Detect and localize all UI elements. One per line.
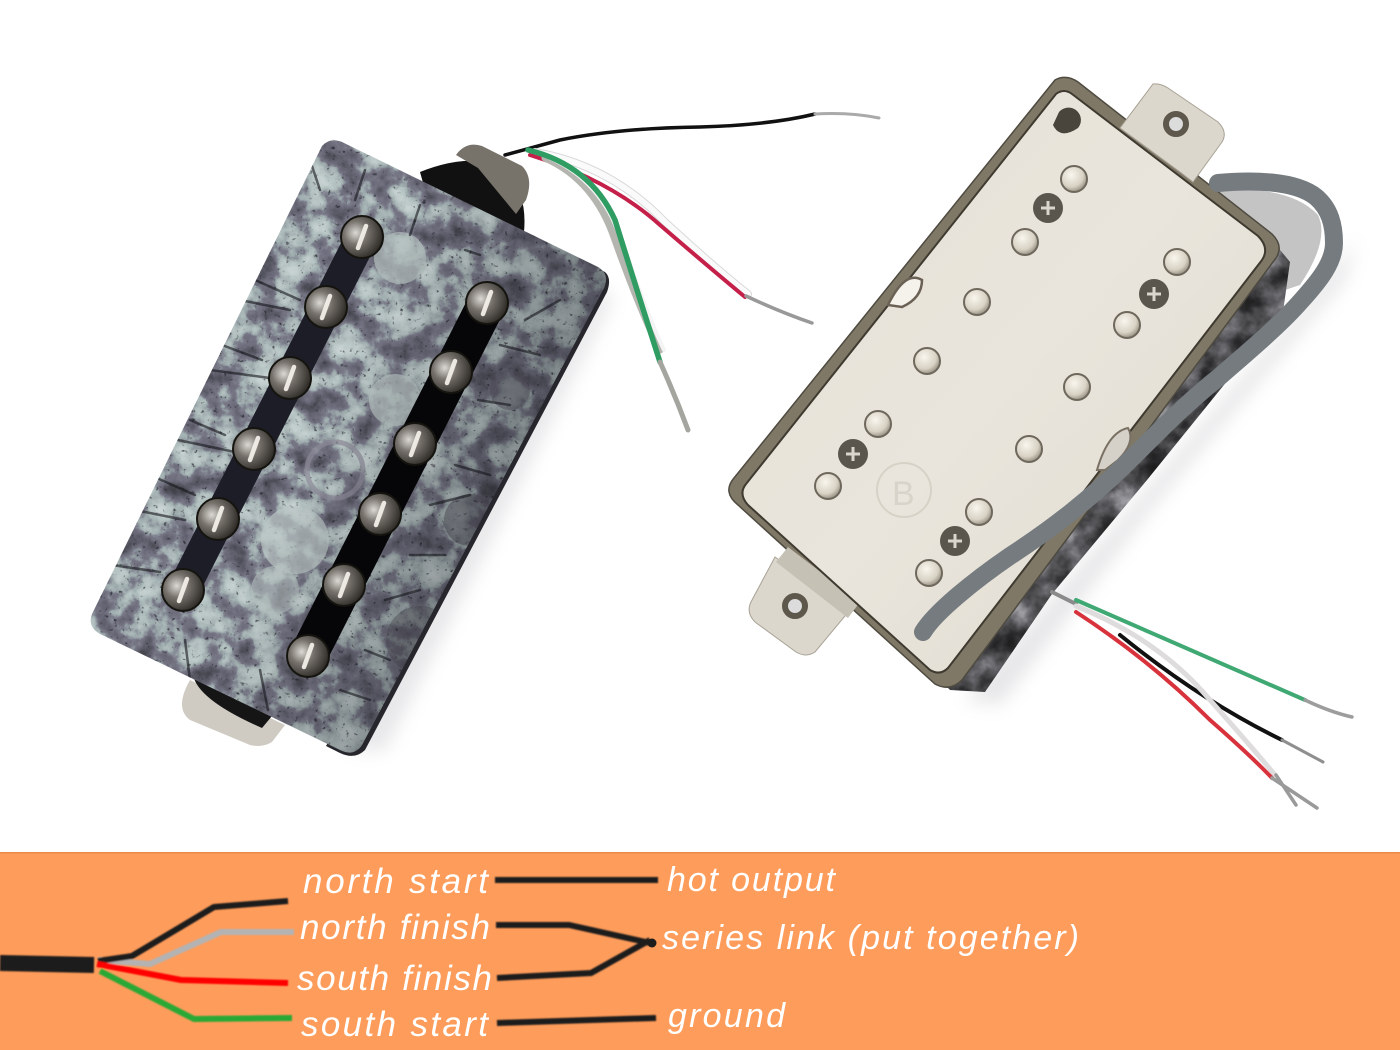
red wire bbox=[1076, 612, 1272, 778]
line: north start to hot output bbox=[495, 877, 658, 883]
bobbin bar: north bbox=[183, 237, 362, 590]
pole pieces: south row bbox=[287, 282, 508, 677]
label: north start: north start bbox=[303, 862, 489, 901]
cable and colored wires bbox=[0, 901, 294, 1019]
cable inner shadow bbox=[1215, 189, 1321, 290]
red wire bbox=[97, 964, 288, 983]
base plate bbox=[742, 91, 1265, 673]
line: south start to ground bbox=[497, 1018, 656, 1023]
photo: back of pickup with base plate bbox=[729, 77, 1355, 808]
phillips screws on base plate bbox=[838, 193, 1169, 556]
embossed logo bbox=[877, 463, 931, 517]
panel background bbox=[0, 852, 1400, 1050]
label: south finish: south finish bbox=[297, 959, 492, 998]
solder joints bbox=[888, 278, 922, 307]
shadow: front pickup bbox=[350, 285, 612, 750]
gray bare wire bbox=[545, 158, 660, 350]
label: south start: south start bbox=[301, 1005, 489, 1044]
pickup side edge bbox=[326, 139, 609, 756]
black stripped end bbox=[1282, 740, 1323, 762]
red and white stripped end bbox=[746, 296, 812, 323]
pole pieces: north row bbox=[162, 216, 383, 611]
pickup side with camouflage bbox=[948, 250, 1290, 692]
hole in plate corner bbox=[1053, 108, 1081, 133]
wires: front pickup bbox=[505, 114, 879, 430]
cover rim bbox=[729, 77, 1279, 687]
panel: wiring diagram bbox=[0, 852, 1400, 1050]
grey shielded cable bbox=[923, 181, 1334, 632]
camouflage cover bbox=[80, 130, 620, 760]
mounting ring: front bottom bbox=[193, 675, 272, 728]
green stripped end bbox=[1305, 700, 1352, 717]
mounting ring: front top bbox=[420, 161, 524, 232]
black wire bbox=[98, 901, 288, 961]
green wire bbox=[1076, 600, 1305, 700]
red and white stripped ends bbox=[1272, 775, 1317, 808]
tab screw hole: top bbox=[1166, 114, 1186, 134]
green wire bbox=[528, 150, 660, 362]
pole pegs on base plate bbox=[815, 166, 1190, 586]
tab screw hole: bottom bbox=[785, 596, 805, 616]
red wire bbox=[530, 155, 745, 297]
shadow: back pickup bbox=[965, 240, 1355, 705]
cover edge shading bbox=[239, 206, 606, 752]
label: hot output: hot output bbox=[667, 861, 837, 899]
line: north finish to series link bbox=[496, 925, 650, 943]
black wire stripped end bbox=[815, 114, 879, 118]
black wire bbox=[1120, 635, 1282, 740]
label: series link: series link (put together) bbox=[662, 919, 1079, 957]
embossed logo: B bbox=[892, 475, 915, 513]
mounting tab: top bbox=[1120, 84, 1224, 182]
label: north finish: north finish bbox=[300, 908, 490, 947]
cover blotches bbox=[251, 232, 530, 674]
photo: front of pickup with camouflage cover bbox=[80, 114, 879, 760]
white wire beside green bbox=[550, 158, 664, 350]
black wire bbox=[505, 114, 815, 155]
label: ground: ground bbox=[668, 997, 786, 1035]
white wire bbox=[1076, 606, 1275, 775]
pole screw slots bbox=[179, 226, 491, 667]
mounting tab: front top bbox=[456, 145, 529, 214]
green wire bbox=[100, 971, 292, 1019]
cover crack marks bbox=[112, 160, 560, 710]
green stripped end bbox=[660, 362, 688, 430]
wires: back pickup bbox=[1052, 592, 1352, 808]
cover speckle bbox=[80, 130, 620, 760]
solder joint: lower bbox=[1097, 428, 1130, 470]
black cable bbox=[0, 963, 94, 965]
panel top edge bbox=[0, 852, 1400, 854]
mounting tab: front bottom bbox=[182, 680, 285, 746]
grey wire bbox=[98, 932, 294, 964]
junction point bbox=[648, 938, 656, 948]
mounting tab: bottom bbox=[749, 547, 860, 655]
white wire bbox=[535, 152, 748, 294]
white wire fill bbox=[535, 152, 748, 294]
bobbin bar: south bbox=[308, 303, 487, 656]
cable jacket end bbox=[1052, 592, 1076, 604]
line: south finish to series link bbox=[497, 940, 650, 978]
connection lines bbox=[495, 880, 658, 1023]
